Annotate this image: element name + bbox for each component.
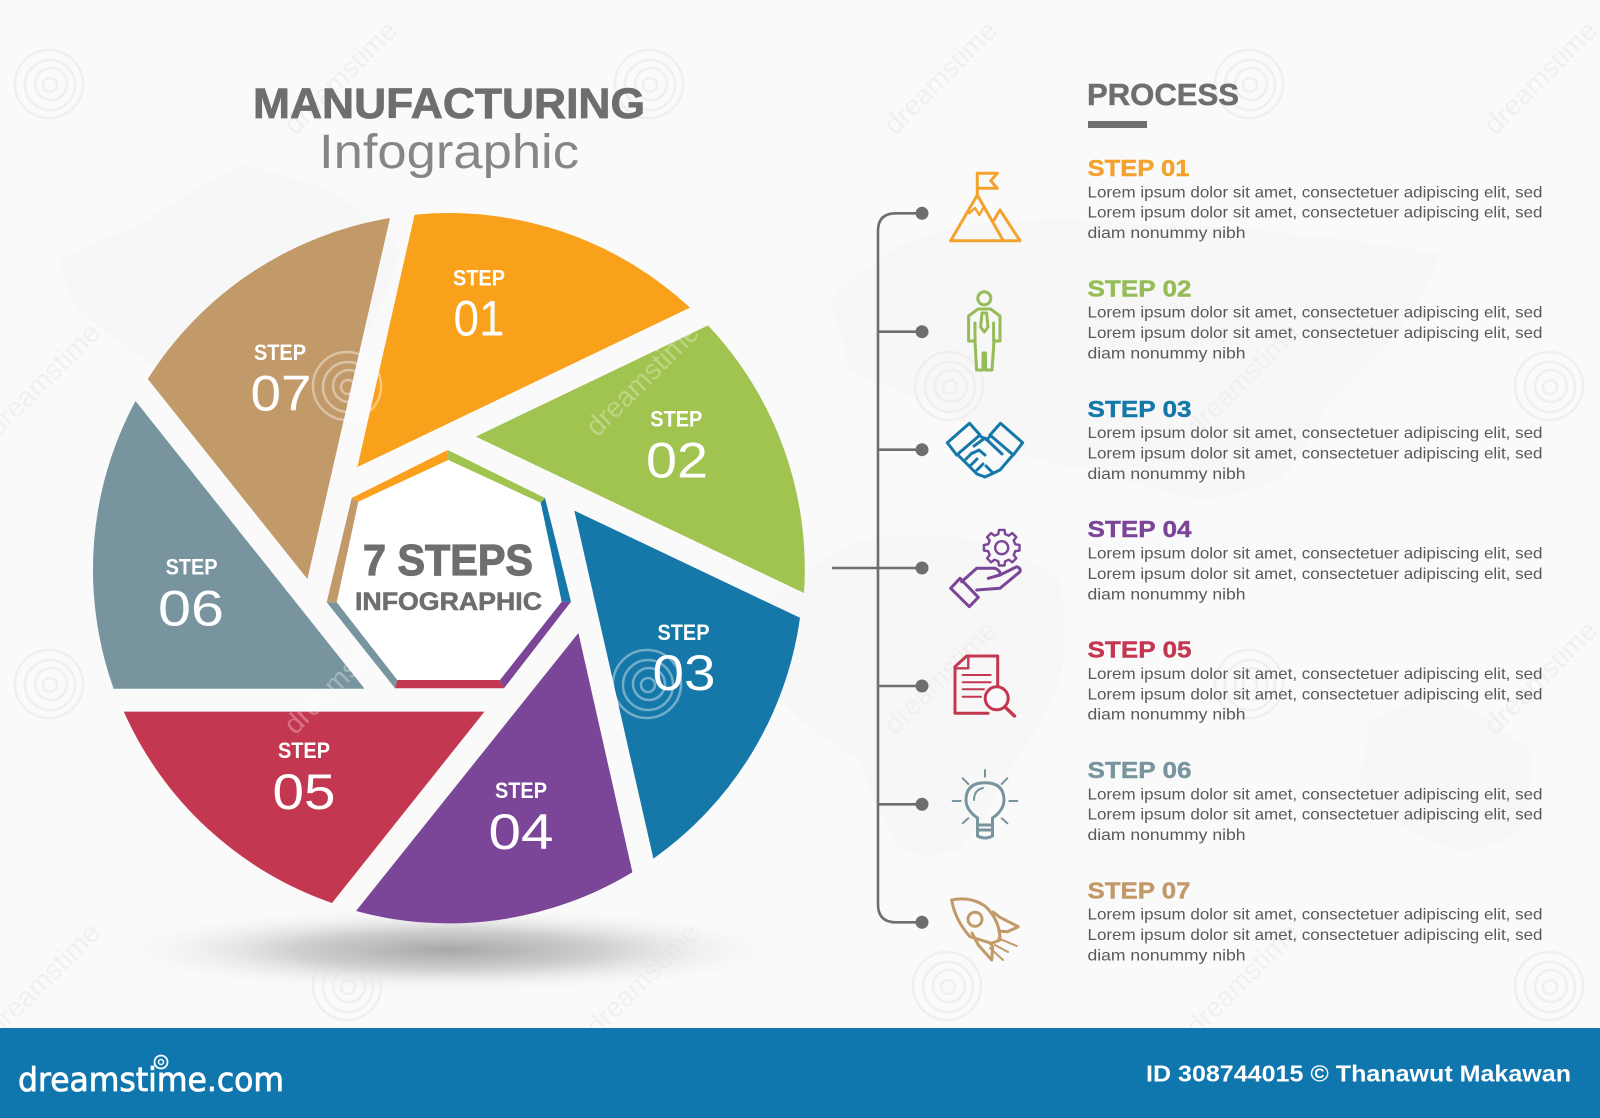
step 02 text — [1088, 275, 1542, 362]
footer logo: dreamstime.com — [18, 1060, 284, 1099]
step 07 text: Lorem ipsum dolor sit amet, consectetuer adipiscing elit, sed — [1088, 927, 1542, 944]
segment: step 03: STEP — [658, 620, 710, 645]
segment: step 05: STEP — [278, 738, 330, 763]
step 04 text — [1088, 516, 1542, 603]
connector tree — [832, 207, 928, 929]
icon: hand holding gear — [951, 530, 1020, 607]
segment: step 07: STEP — [254, 340, 306, 365]
step 03 text: diam nonummy nibh — [1088, 466, 1246, 483]
segment: step 06: 06 — [158, 580, 224, 636]
step 03 text: Lorem ipsum dolor sit amet, consectetuer adipiscing elit, sed — [1088, 446, 1542, 462]
step 05 text: Lorem ipsum dolor sit amet, consectetuer adipiscing elit, sed — [1088, 666, 1542, 683]
icon: handshake — [947, 423, 1023, 477]
step 07 text: diam nonummy nibh — [1088, 948, 1246, 964]
step 04 text: Lorem ipsum dolor sit amet, consectetuer adipiscing elit, sed — [1088, 566, 1542, 583]
step 07 text: STEP 07 — [1088, 877, 1190, 903]
step 04 text: diam nonummy nibh — [1088, 586, 1246, 603]
infographic canvas: dreamstime — [580, 917, 705, 1042]
infographic canvas: dreamstime — [1180, 317, 1305, 442]
segment: step 07: 07 — [250, 366, 312, 422]
step 07 text: Lorem ipsum dolor sit amet, consectetuer adipiscing elit, sed — [1088, 907, 1542, 924]
infographic canvas: dreamstime — [1478, 15, 1600, 140]
segment: step 03: 03 — [652, 645, 716, 701]
segment: step 06: STEP — [166, 554, 218, 579]
segment: step 06 — [93, 401, 365, 689]
step 05 text — [1088, 637, 1542, 724]
icon: document with magnifier — [955, 656, 1014, 716]
icon: mountain with flag — [951, 173, 1020, 241]
step 02 text: STEP 02 — [1088, 275, 1192, 301]
step 03 text: STEP 03 — [1088, 396, 1192, 422]
step 04 text: Lorem ipsum dolor sit amet, consectetuer adipiscing elit, sed — [1088, 546, 1542, 562]
badge heading: 7 STEPS — [363, 536, 533, 585]
center heptagon badge — [327, 450, 571, 688]
infographic canvas: dreamstime — [1180, 917, 1305, 1042]
segment: step 02: STEP — [650, 406, 702, 431]
pie chart: seven shutter segments — [93, 213, 805, 923]
process heading — [1087, 77, 1239, 128]
segment: step 04 — [356, 633, 632, 923]
segment: step 02 — [476, 325, 805, 593]
segment: step 02: 02 — [646, 432, 708, 488]
step 05 text: Lorem ipsum dolor sit amet, consectetuer adipiscing elit, sed — [1088, 686, 1542, 703]
infographic canvas: dreamstime — [878, 615, 1003, 740]
icon: rocket — [952, 899, 1018, 960]
segment: step 03 — [574, 511, 800, 859]
segment: step 04: STEP — [495, 778, 547, 803]
process heading: PROCESS — [1087, 77, 1239, 112]
title — [253, 80, 645, 179]
step 06 text — [1088, 757, 1542, 844]
step 01 text: Lorem ipsum dolor sit amet, consectetuer adipiscing elit, sed — [1088, 184, 1542, 201]
footer bar — [0, 1028, 1600, 1118]
infographic canvas: dreamstime — [278, 615, 403, 740]
segment: step 01: 01 — [454, 291, 504, 347]
step 01 text — [1088, 155, 1542, 242]
step 05 text: diam nonummy nibh — [1088, 707, 1246, 724]
badge subheading: INFOGRAPHIC — [355, 588, 542, 616]
infographic canvas: dreamstime — [1478, 615, 1600, 740]
step 06 text: STEP 06 — [1088, 757, 1192, 783]
step 03 text: Lorem ipsum dolor sit amet, consectetuer adipiscing elit, sed — [1088, 425, 1542, 442]
step 07 text — [1088, 877, 1542, 964]
title line: infographic: Infographic — [319, 126, 579, 179]
segment: step 05 — [124, 712, 485, 903]
segment: step 07 — [148, 218, 390, 579]
step 01 text: Lorem ipsum dolor sit amet, consectetuer adipiscing elit, sed — [1088, 205, 1542, 222]
step 02 text: Lorem ipsum dolor sit amet, consectetuer adipiscing elit, sed — [1088, 305, 1542, 322]
infographic canvas: dreamstime — [580, 317, 705, 442]
infographic canvas: dreamstime — [278, 15, 403, 140]
step 02 text: Lorem ipsum dolor sit amet, consectetuer adipiscing elit, sed — [1088, 325, 1542, 342]
icon: light bulb — [953, 770, 1017, 838]
step 06 text: Lorem ipsum dolor sit amet, consectetuer adipiscing elit, sed — [1088, 786, 1542, 803]
step 02 text: diam nonummy nibh — [1088, 346, 1246, 362]
segment: step 01: STEP — [453, 266, 505, 291]
step 01 text: STEP 01 — [1088, 155, 1190, 181]
footer credit: ID 308744015 © Thanawut Makawan — [1146, 1061, 1571, 1087]
segment: step 01 — [357, 213, 690, 467]
step 06 text: Lorem ipsum dolor sit amet, consectetuer adipiscing elit, sed — [1088, 807, 1542, 824]
segment: step 04: 04 — [488, 804, 554, 860]
pie ground shadow — [104, 906, 794, 994]
step 01 text: diam nonummy nibh — [1088, 225, 1246, 242]
title line: manufacturing: MANUFACTURING — [253, 80, 645, 128]
segment: step 05: 05 — [272, 764, 336, 820]
step 04 text: STEP 04 — [1088, 516, 1192, 542]
step 06 text: diam nonummy nibh — [1088, 827, 1246, 844]
step 05 text: STEP 05 — [1088, 637, 1192, 663]
infographic canvas: dreamstime — [878, 15, 1003, 140]
step 03 text — [1088, 396, 1542, 483]
icon: business person — [969, 292, 1000, 370]
